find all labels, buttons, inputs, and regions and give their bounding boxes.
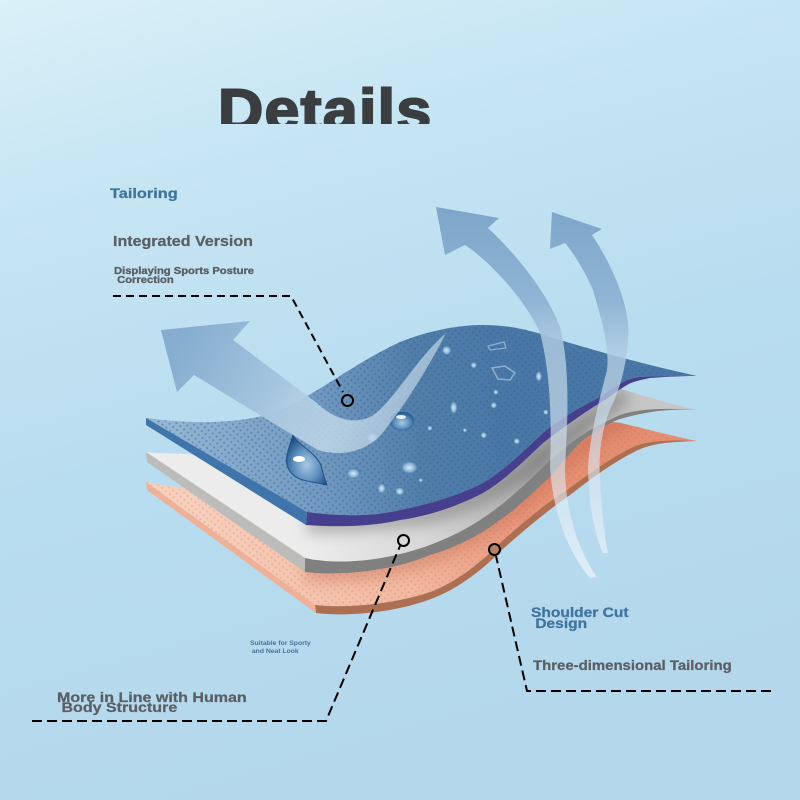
leader line: body structure xyxy=(32,535,409,721)
label: shoulder cut design: Shoulder Cut Design xyxy=(531,604,629,630)
blue front edge xyxy=(146,418,307,525)
label: suitable for sporty: Suitable for Sporty and Neat Look xyxy=(250,640,311,655)
water droplets xyxy=(286,342,548,495)
label: human body structure: More in Line with Human Body Structure xyxy=(57,688,247,715)
arrow: left xyxy=(161,321,446,453)
label: three-dimensional tailoring: Three-dimensional Tailoring xyxy=(533,657,732,673)
peach front edge xyxy=(146,482,316,613)
peach fabric layer xyxy=(146,410,697,614)
arrow: right xyxy=(550,212,628,553)
label: integrated version: Integrated Version xyxy=(113,234,253,250)
white front edge xyxy=(146,452,305,572)
label: tailoring: Tailoring xyxy=(110,185,178,201)
white fabric layer xyxy=(146,386,697,573)
purple edge xyxy=(306,376,697,526)
label: displaying sports posture correction: Displaying Sports Posture Correction xyxy=(114,266,254,286)
leader line: shoulder cut xyxy=(489,544,771,691)
grey edge xyxy=(305,409,697,573)
peach brown edge xyxy=(315,441,697,614)
blue fabric layer xyxy=(146,325,697,526)
arrow: centre xyxy=(436,207,597,578)
leader line: tailoring xyxy=(113,296,353,406)
